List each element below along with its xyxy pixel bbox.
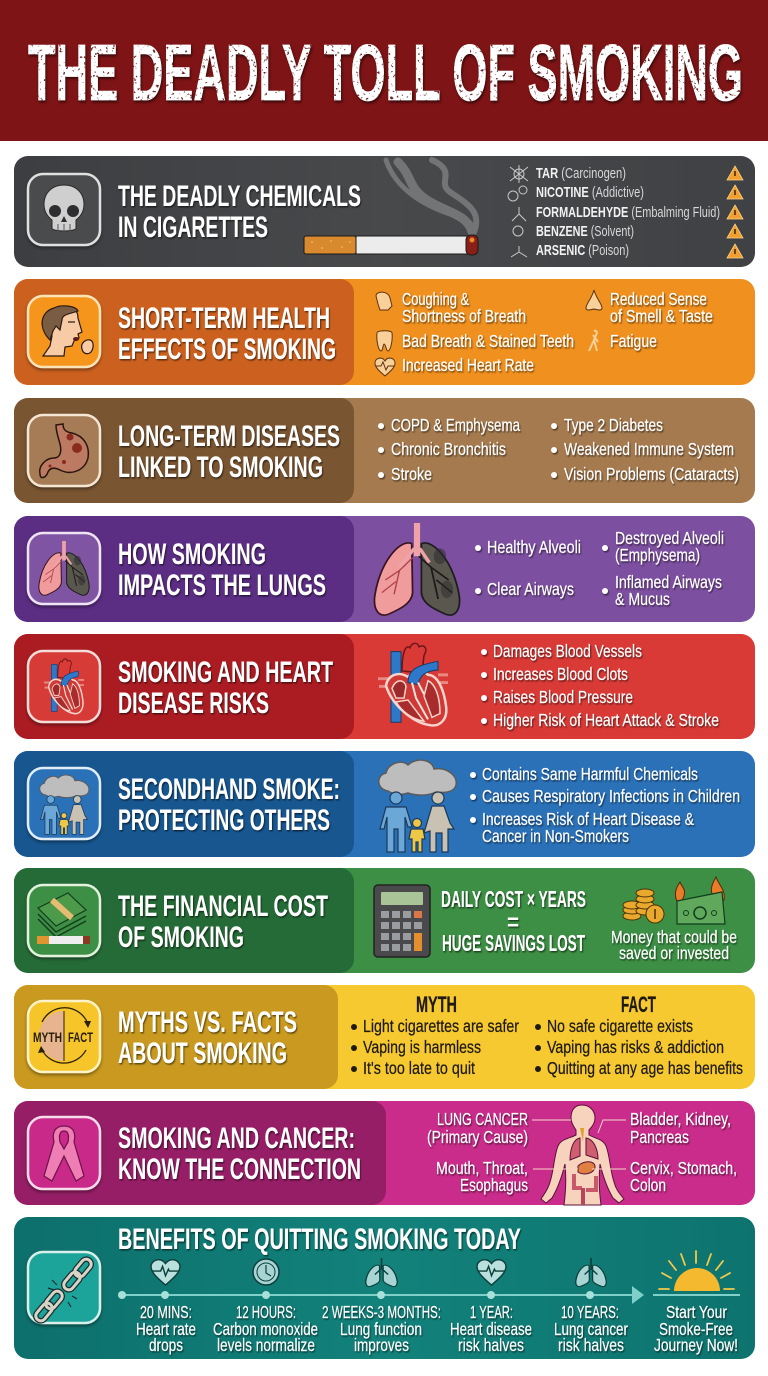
chemicals list: TAR (Carcinogen) — [536, 165, 626, 182]
icon: calculator — [374, 885, 430, 957]
icon: small lungs — [28, 533, 100, 604]
cancer labels: Colon — [630, 1175, 666, 1195]
icon: cigarette — [304, 235, 478, 255]
effect list — [402, 289, 713, 375]
icon: stomach — [28, 415, 100, 486]
cancer labels — [427, 1109, 737, 1195]
heading: BENEFITS OF QUITTING SMOKING TODAY — [118, 1223, 521, 1256]
milestone labels: Start Your — [666, 1302, 727, 1322]
illustration: lungs — [374, 523, 460, 615]
smoke list: Cancer in Non-Smokers — [482, 826, 629, 846]
smoke list: Increases Risk of Heart Disease & — [482, 809, 694, 829]
heading: PROTECTING OTHERS — [118, 804, 330, 837]
milestone labels: drops — [149, 1335, 183, 1355]
lung list: Destroyed Alveoli — [615, 528, 724, 548]
milestone labels — [136, 1302, 738, 1355]
icon: myth fact: MYTH — [33, 1029, 62, 1045]
fact column: No safe cigarette exists — [547, 1016, 693, 1036]
heading: SMOKING AND CANCER: — [118, 1122, 355, 1155]
panel: benefits of quitting — [14, 1217, 755, 1359]
heading: SHORT-TERM HEALTH — [118, 302, 330, 335]
cancer labels: LUNG CANCER — [437, 1109, 528, 1129]
panel: secondhand smoke — [14, 751, 755, 857]
smoke list — [470, 764, 740, 846]
heading: OF SMOKING — [118, 921, 244, 954]
heading: DISEASE RISKS — [118, 687, 269, 720]
heading — [118, 538, 326, 602]
connector lines — [532, 1120, 626, 1169]
cancer labels: Pancreas — [630, 1127, 689, 1147]
icon: skull — [28, 174, 100, 245]
cancer labels: Cervix, Stomach, — [630, 1158, 737, 1178]
heading: MYTHS VS. FACTS — [118, 1006, 297, 1039]
heading: SMOKING AND HEART — [118, 656, 333, 689]
myth column — [351, 992, 519, 1078]
effect list: of Smell & Taste — [610, 306, 713, 326]
heart list: Damages Blood Vessels — [493, 641, 642, 661]
fact column: FACT — [621, 992, 656, 1017]
cancer labels: Mouth, Throat, — [436, 1158, 528, 1178]
lung list — [475, 528, 724, 609]
panel: short-term effects — [14, 279, 755, 385]
chemicals list: NICOTINE (Addictive) — [536, 184, 644, 201]
heart list: Higher Risk of Heart Attack & Stroke — [493, 710, 719, 730]
heading — [118, 773, 340, 837]
icon: broken chain — [28, 1252, 100, 1323]
panel: myths vs facts — [14, 985, 755, 1089]
heading — [118, 1006, 297, 1070]
formula: DAILY COST × YEARS — [441, 886, 586, 912]
effect list: Coughing & — [402, 289, 469, 309]
milestone labels: Journey Now! — [654, 1335, 738, 1355]
fact column — [535, 992, 743, 1078]
milestone icons — [151, 1258, 606, 1287]
milestone labels: 12 HOURS: — [236, 1302, 296, 1322]
lung list: Inflamed Airways — [615, 572, 722, 592]
milestone labels: levels normalize — [217, 1335, 315, 1355]
icon: myth fact — [28, 1001, 100, 1072]
panel: cancer — [14, 1101, 755, 1205]
icon: ribbon — [28, 1117, 100, 1189]
milestone labels: risk halves — [558, 1335, 624, 1355]
effect list: Fatigue — [610, 331, 657, 351]
panel: heart — [14, 634, 755, 739]
disease list: Chronic Bronchitis — [391, 439, 506, 459]
heading: LINKED TO SMOKING — [118, 451, 323, 484]
milestone labels: improves — [354, 1335, 409, 1355]
milestone labels: 20 MINS: — [140, 1302, 192, 1322]
heading: EFFECTS OF SMOKING — [118, 333, 336, 366]
disease list — [378, 415, 739, 484]
effect icons — [375, 290, 602, 376]
cancer labels: Esophagus — [460, 1175, 528, 1195]
heading — [118, 890, 328, 954]
lung list: Clear Airways — [487, 579, 574, 599]
illustration: heart — [378, 643, 448, 725]
heart list — [481, 641, 719, 730]
myth column: Vaping is harmless — [363, 1037, 481, 1057]
chemicals list: BENZENE (Solvent) — [536, 223, 634, 240]
smoke list: Contains Same Harmful Chemicals — [482, 764, 698, 784]
icon: smoke — [386, 160, 476, 232]
heading: THE DEADLY CHEMICALS — [118, 180, 361, 213]
milestone labels: Heart disease — [450, 1319, 532, 1339]
milestone labels: Heart rate — [136, 1319, 196, 1339]
icon: sunrise — [653, 1251, 740, 1295]
timeline — [118, 1286, 644, 1304]
lung list: (Emphysema) — [615, 545, 700, 565]
chemicals list: FORMALDEHYDE (Embalming Fluid) — [536, 204, 720, 221]
heart list: Raises Blood Pressure — [493, 687, 633, 707]
icon: coins — [623, 889, 664, 923]
myth column: MYTH — [416, 992, 457, 1017]
heading: KNOW THE CONNECTION — [118, 1153, 361, 1186]
milestone labels: Lung cancer — [554, 1319, 628, 1339]
milestone labels: 1 YEAR: — [470, 1302, 513, 1322]
panel: financial cost — [14, 868, 755, 973]
milestone labels: Smoke-Free — [659, 1319, 733, 1339]
effect list: Shortness of Breath — [402, 306, 526, 326]
effect list: Reduced Sense — [610, 289, 707, 309]
heading: THE FINANCIAL COST — [118, 890, 328, 923]
heading — [118, 656, 333, 720]
chemicals list — [508, 165, 720, 259]
icon: coughing man — [28, 296, 100, 367]
heading: IN CIGARETTES — [118, 211, 268, 244]
caption: saved or invested — [619, 943, 729, 963]
formula: = — [507, 909, 519, 935]
heading: SECONDHAND SMOKE: — [118, 773, 340, 806]
milestone labels: 2 WEEKS-3 MONTHS: — [322, 1302, 441, 1322]
icon: small heart — [28, 651, 100, 722]
heading — [118, 1122, 361, 1186]
cancer labels: (Primary Cause) — [427, 1127, 528, 1147]
effect list: Increased Heart Rate — [402, 355, 534, 375]
myth column: It's too late to quit — [363, 1058, 475, 1078]
heading — [118, 420, 340, 484]
caption: Money that could be — [611, 927, 737, 947]
milestone labels: Carbon monoxide — [213, 1319, 318, 1339]
milestone labels: Lung function — [340, 1319, 422, 1339]
disease list: Type 2 Diabetes — [564, 415, 663, 435]
heading — [118, 180, 361, 244]
panel: long-term diseases — [14, 398, 755, 503]
lung list: & Mucus — [615, 589, 670, 609]
milestone labels: 10 YEARS: — [561, 1302, 619, 1322]
fact column: Vaping has risks & addiction — [547, 1037, 724, 1057]
heading: HOW SMOKING — [118, 538, 266, 571]
header banner — [0, 0, 768, 141]
icon: burning money — [675, 877, 725, 924]
heart list: Increases Blood Clots — [493, 664, 628, 684]
effect list: Bad Breath & Stained Teeth — [402, 331, 574, 351]
heading: ABOUT SMOKING — [118, 1037, 287, 1070]
caption — [611, 927, 737, 963]
milestone labels: risk halves — [458, 1335, 524, 1355]
illustration: family under smoke cloud — [379, 760, 456, 852]
heading: IMPACTS THE LUNGS — [118, 569, 326, 602]
panel: lungs — [14, 516, 755, 622]
icon: small family — [28, 768, 100, 839]
heading — [118, 302, 336, 366]
illustration: human body — [541, 1105, 624, 1205]
heading: LONG-TERM DISEASES — [118, 420, 340, 453]
lung list: Healthy Alveoli — [487, 537, 581, 557]
formula — [441, 886, 586, 956]
cancer labels: Bladder, Kidney, — [630, 1109, 731, 1129]
warning icons — [727, 166, 743, 258]
icon: myth fact: FACT — [68, 1029, 93, 1045]
disease list: COPD & Emphysema — [391, 415, 520, 435]
myth column: Light cigarettes are safer — [363, 1016, 519, 1036]
chemicals list: ARSENIC (Poison) — [536, 242, 629, 259]
icon: money and cigarette — [28, 885, 100, 956]
formula: HUGE SAVINGS LOST — [442, 930, 585, 956]
panel: deadly chemicals — [14, 156, 755, 267]
disease list: Stroke — [391, 464, 432, 484]
